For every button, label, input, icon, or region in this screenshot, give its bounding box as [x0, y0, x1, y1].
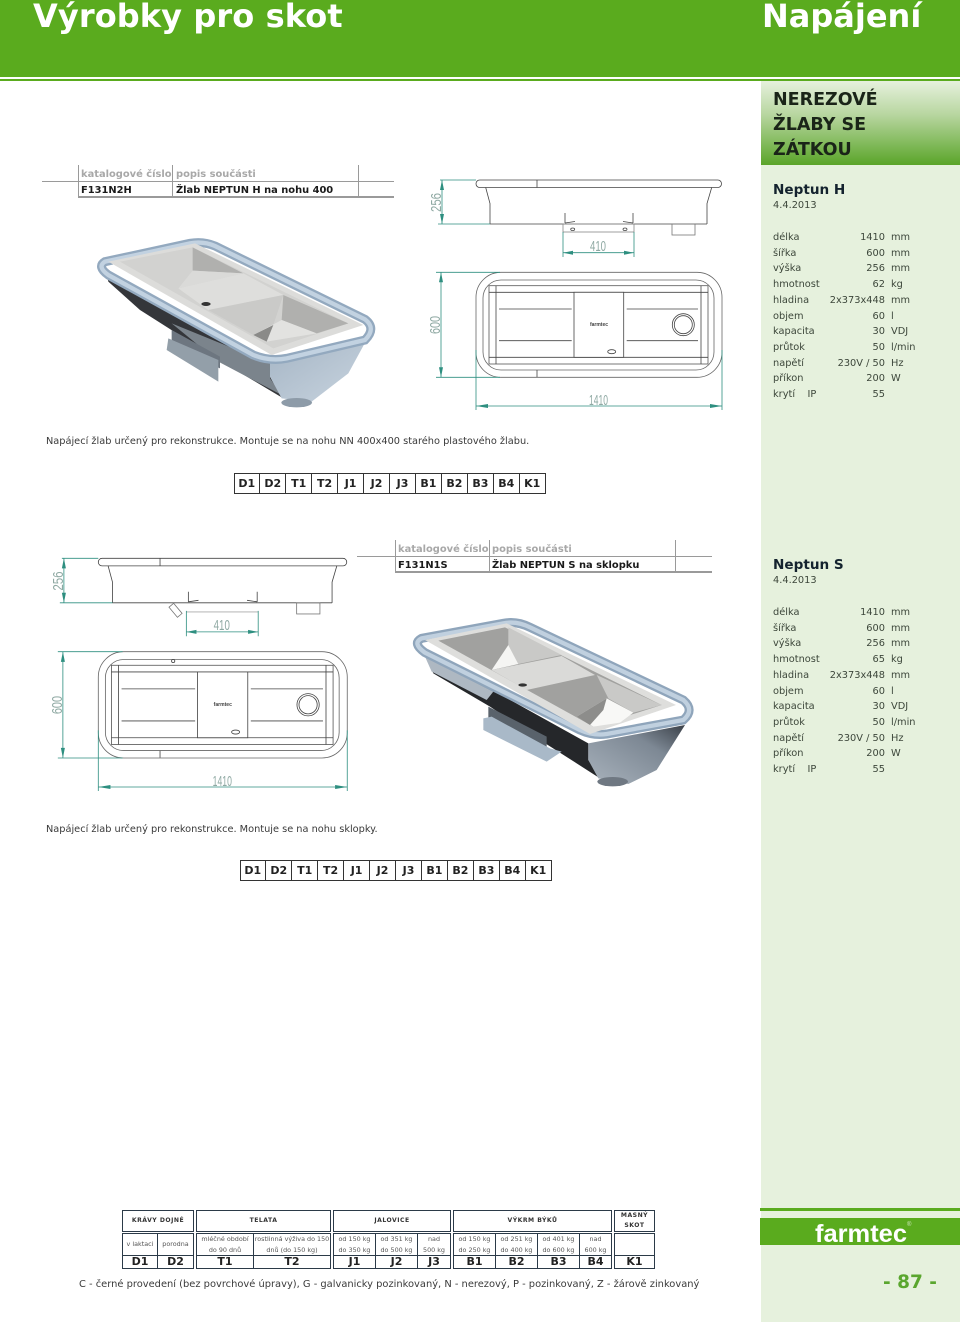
suitability codes: Neptun S: B2 [452, 864, 468, 877]
legend table: livestock categories: nad [589, 1235, 602, 1243]
spec list: šířka [773, 248, 796, 259]
suitability codes: Neptun H: D1 [238, 477, 255, 490]
legend table: livestock categories [122, 1210, 655, 1269]
spec list: 60 [873, 686, 885, 697]
legend table: livestock categories: rostlinná výživa do 150 [255, 1235, 329, 1243]
suitability codes: Neptun H: B2 [446, 477, 462, 490]
spec list: mm [891, 638, 910, 649]
legend table: livestock categories: B3 [550, 1255, 567, 1268]
suitability codes: Neptun S: K1 [530, 864, 546, 877]
footer logo band [760, 1208, 960, 1246]
technical drawing: Neptun S: 410 [214, 618, 230, 634]
spec list: objem [773, 686, 804, 697]
spec list: krytí IP [773, 389, 816, 400]
catalogue table: Neptun S [357, 540, 712, 573]
spec list: 230V / 50 [838, 733, 885, 744]
suitability codes: Neptun S [240, 860, 552, 881]
sidebar heading [773, 88, 878, 160]
legend table: livestock categories: do 400 kg [500, 1246, 532, 1254]
spec list: kapacita [773, 701, 815, 712]
legend table: livestock categories: od 150 kg [338, 1235, 370, 1243]
technical drawing: Neptun H: 600 [428, 316, 444, 334]
suitability codes: Neptun S: J1 [351, 864, 362, 877]
spec list: výška [773, 263, 801, 274]
suitability codes: Neptun H: T1 [291, 477, 306, 490]
category: dairy cows: KRÁVY DOJNÉ [132, 1217, 184, 1224]
spec list: 55 [873, 764, 885, 775]
spec list: 200 [866, 748, 885, 759]
spec list: 1410 [860, 232, 885, 243]
legend table: livestock categories: B4 [587, 1255, 604, 1268]
legend table: livestock categories: T2 [284, 1255, 300, 1268]
spec list: krytí IP [773, 764, 816, 775]
technical drawing: Neptun H: 1410 [589, 393, 608, 409]
spec list: 256 [866, 638, 885, 649]
legend table: livestock categories: T1 [217, 1255, 233, 1268]
spec list: mm [891, 623, 910, 634]
suitability codes: Neptun H: T2 [317, 477, 332, 490]
spec list: 30 [873, 701, 885, 712]
column header: part description: popis součásti [176, 168, 256, 180]
spec list: příkon [773, 748, 804, 759]
spec list: 55 [873, 389, 885, 400]
spec list: kapacita [773, 326, 815, 337]
category: beef cattle: SKOT [624, 1222, 645, 1229]
part description: Žlab NEPTUN S na sklopku [492, 560, 639, 570]
suitability codes: Neptun S: J3 [403, 864, 414, 877]
legend table: livestock categories: do 250 kg [458, 1246, 490, 1254]
3D illustration: Neptun H trough [97, 238, 376, 408]
spec list: průtok [773, 342, 805, 353]
spec list: hmotnost [773, 279, 820, 290]
spec list: šířka [773, 623, 796, 634]
suitability codes: Neptun S: T2 [323, 864, 338, 877]
spec list: W [891, 373, 901, 384]
spec list: hladina [773, 295, 809, 306]
technical drawing: Neptun H: 410 [590, 239, 606, 255]
legend table: livestock categories: 600 kg [584, 1246, 606, 1254]
spec list: 65 [873, 654, 885, 665]
product name: Neptun S [773, 557, 844, 573]
spec list: mm [891, 263, 910, 274]
technical drawing: Neptun S: 256 [51, 571, 67, 591]
sidebar panel [761, 81, 960, 1322]
legend table: livestock categories: od 251 kg [500, 1235, 532, 1243]
spec list: VDJ [891, 326, 908, 337]
description: Neptun H: Napájecí žlab určený pro rekonstrukce. Montuje se na nohu NN 400x400 starého plastového žlabu. [46, 436, 529, 446]
spec list: W [891, 748, 901, 759]
part description: Žlab NEPTUN H na nohu 400 [176, 184, 333, 196]
suitability codes: Neptun H: B3 [472, 477, 488, 490]
suitability codes: Neptun S: B3 [478, 864, 494, 877]
category: beef cattle: MASNÝ [621, 1212, 648, 1219]
legend table: livestock categories: nad [428, 1235, 440, 1243]
sidebar heading: ŽLABY SE [773, 114, 866, 134]
suitability codes: Neptun S: T1 [297, 864, 312, 877]
spec list: kg [891, 279, 903, 290]
technical drawing: Neptun S: 1410 [213, 774, 232, 790]
spec list: 600 [866, 248, 885, 259]
legend table: livestock categories: mléčné období [201, 1235, 249, 1243]
spec block: Neptun H [773, 182, 916, 400]
spec list: 600 [866, 623, 885, 634]
3D illustration: Neptun S trough [412, 618, 694, 786]
spec list: mm [891, 232, 910, 243]
spec list: 2x373x448 [830, 670, 885, 681]
category: beef cattle [614, 1210, 655, 1232]
legend table: livestock categories: do 500 kg [380, 1246, 412, 1254]
technical drawing: Neptun S: 600 [50, 696, 66, 714]
description: Neptun S: Napájecí žlab určený pro rekonstrukce. Montuje se na nohu sklopky. [46, 824, 378, 834]
category: calves: TELATA [250, 1217, 277, 1224]
suitability codes: Neptun S: J2 [377, 864, 388, 877]
legend table: livestock categories: do 90 dnů [209, 1246, 241, 1254]
legend table: livestock categories: porodna [162, 1240, 189, 1248]
category: heifers [333, 1210, 451, 1232]
page number: - 87 - [883, 1272, 937, 1293]
legend table: livestock categories: do 350 kg [338, 1246, 370, 1254]
finish legend: C - černé provedení (bez povrchové úpravy), G - galvanicky pozinkovaný, N - nerezový, P - pozinkovaný, Z - žárově zinkovaný [79, 1278, 699, 1290]
spec list: 50 [873, 717, 885, 728]
suitability codes: Neptun S: D2 [270, 864, 287, 877]
spec list: mm [891, 248, 910, 259]
legend table: livestock categories: dnů (do 150 kg) [266, 1246, 318, 1254]
column header: part description: popis součásti [492, 544, 572, 554]
spec list: hmotnost [773, 654, 820, 665]
spec list: napětí [773, 733, 804, 744]
spec list: 60 [873, 311, 885, 322]
legend table: livestock categories: J2 [391, 1255, 402, 1268]
column header: catalogue number: katalogové číslo [398, 544, 488, 554]
suitability codes: Neptun S: B4 [504, 864, 520, 877]
column header: catalogue number: katalogové číslo [81, 168, 172, 180]
spec list: 1410 [860, 607, 885, 618]
suitability codes: Neptun H: J2 [371, 477, 382, 490]
suitability codes: Neptun H [234, 473, 546, 494]
suitability codes: Neptun H: K1 [524, 477, 540, 490]
technical drawing: Neptun S: farmtec [214, 702, 232, 708]
suitability codes: Neptun S: D1 [244, 864, 261, 877]
spec list: l/min [891, 717, 916, 728]
spec list: l [891, 311, 894, 322]
spec block: Neptun S [773, 557, 916, 775]
spec list: délka [773, 607, 799, 618]
spec list: průtok [773, 717, 805, 728]
legend table: livestock categories: v laktaci [127, 1240, 153, 1248]
category: bull fattening [453, 1210, 612, 1232]
suitability codes: Neptun S: B1 [426, 864, 442, 877]
spec list: l [891, 686, 894, 697]
category: dairy cows [122, 1210, 194, 1232]
spec list: 256 [866, 263, 885, 274]
legend table: livestock categories: B1 [466, 1255, 483, 1268]
legend table: livestock categories: od 351 kg [380, 1235, 412, 1243]
spec list: 200 [866, 373, 885, 384]
spec list: Hz [891, 733, 904, 744]
spec list: příkon [773, 373, 804, 384]
legend table: livestock categories: K1 [626, 1255, 643, 1268]
logo: farmtec: ® [907, 1221, 912, 1228]
date: 4.4.2013 [773, 575, 817, 586]
spec list: VDJ [891, 701, 908, 712]
category: heifers: JALOVICE [374, 1217, 410, 1224]
suitability codes: Neptun H: D2 [264, 477, 281, 490]
catalogue number: F131N1S [398, 560, 448, 570]
sidebar heading: NEREZOVÉ [773, 90, 878, 110]
spec list: mm [891, 607, 910, 618]
technical drawing: Neptun H: farmtec [590, 322, 608, 328]
spec list: 50 [873, 342, 885, 353]
sidebar heading: ZÁTKOU [773, 140, 852, 160]
product name: Neptun H [773, 182, 845, 198]
legend table: livestock categories: B2 [508, 1255, 525, 1268]
suitability codes: Neptun H: B1 [420, 477, 436, 490]
legend table: livestock categories: D1 [132, 1255, 148, 1268]
spec list: 30 [873, 326, 885, 337]
spec list: objem [773, 311, 804, 322]
spec list [773, 232, 916, 400]
spec list: délka [773, 232, 799, 243]
legend table: livestock categories: do 600 kg [542, 1246, 574, 1254]
technical drawing: Neptun H: 256 [429, 193, 445, 212]
spec list: Hz [891, 358, 904, 369]
category: bull fattening: VÝKRM BÝKŮ [507, 1217, 558, 1224]
catalogue table: Neptun H [42, 165, 394, 198]
spec list: mm [891, 295, 910, 306]
legend table: livestock categories: od 150 kg [458, 1235, 490, 1243]
technical drawing: Neptun S [50, 558, 348, 791]
header band [0, 0, 960, 81]
suitability codes: Neptun H: J3 [397, 477, 408, 490]
spec list: výška [773, 638, 801, 649]
suitability codes: Neptun H: B4 [498, 477, 514, 490]
legend table: livestock categories: 500 kg [423, 1246, 445, 1254]
spec list: 62 [873, 279, 885, 290]
spec list: napětí [773, 358, 804, 369]
spec list [773, 607, 916, 775]
spec list: hladina [773, 670, 809, 681]
legend table: livestock categories: od 401 kg [542, 1235, 574, 1243]
legend table: livestock categories: D2 [167, 1255, 184, 1268]
spec list: 230V / 50 [838, 358, 885, 369]
legend table: livestock categories: J1 [349, 1255, 360, 1268]
legend table: livestock categories: J3 [428, 1255, 440, 1268]
spec list: kg [891, 654, 903, 665]
date: 4.4.2013 [773, 200, 817, 211]
suitability codes: Neptun H: J1 [345, 477, 356, 490]
spec list: l/min [891, 342, 916, 353]
category: calves [196, 1210, 331, 1232]
technical drawing: Neptun H [428, 180, 722, 410]
spec list: mm [891, 670, 910, 681]
spec list: 2x373x448 [830, 295, 885, 306]
catalogue number: F131N2H [81, 184, 132, 196]
